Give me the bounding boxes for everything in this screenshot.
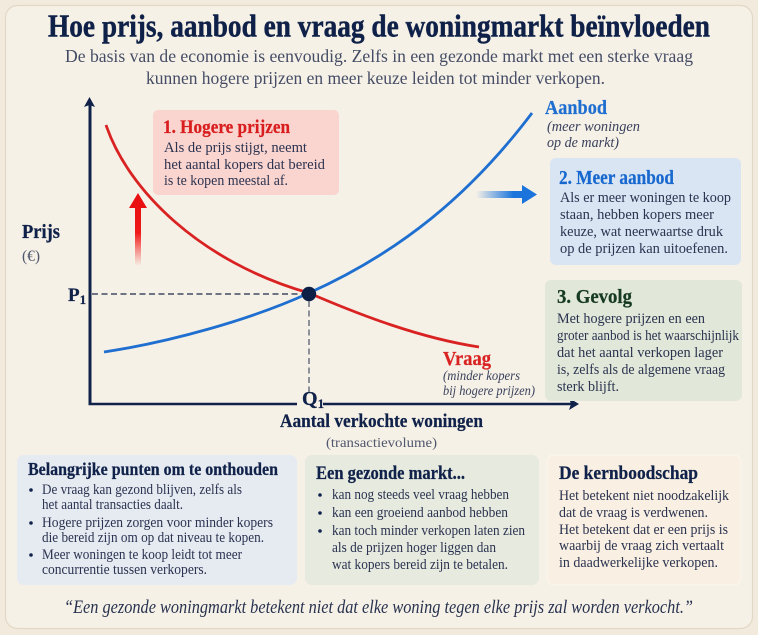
demand label [443,348,535,399]
panel: een gezonde markt: kan een groeiend aanbod hebben [332,505,509,521]
P1 label: 1 [80,292,86,307]
quantity axis [88,398,579,410]
panel: gevolg: dat het aantal verkopen lager [557,344,723,361]
panel: een gezonde markt [305,455,539,585]
P1 label: P [68,285,80,306]
panel: gevolg: 3. Gevolg [557,286,632,308]
panel: een gezonde markt: Een gezonde markt... [316,464,465,484]
panel: hogere prijzen: 1. Hogere prijzen [163,117,290,138]
subtitle: De basis van de economie is eenvoudig. Zelfs in een gezonde markt met een sterke vraag [65,46,693,66]
panel: belangrijke punten [17,455,297,585]
x axis unit: (transactievolume) [326,436,437,451]
supply curve [104,113,532,352]
demand label: Vraag [443,348,492,370]
Q1 label: Q [302,388,318,410]
panel: een gezonde markt: wat kopers bereid zijn te betalen. [332,557,508,573]
panel: de kernboodschap: in daadwerkelijke verkopen. [559,555,718,571]
equilibrium point [302,287,316,301]
panel: belangrijke punten: Hogere prijzen zorgen voor minder kopers [42,515,273,531]
panel: meer aanbod: 2. Meer aanbod [559,167,674,189]
supply label: Aanbod [545,97,607,119]
arrow: more supply [476,185,537,204]
panel: meer aanbod: Als er meer woningen te koop [560,189,731,206]
y axis unit: (€) [22,248,40,265]
subtitle: kunnen hogere prijzen en meer keuze leiden tot minder verkopen. [146,68,605,88]
arrow: price up [129,193,147,266]
y axis label: Prijs [22,221,60,243]
panel: hogere prijzen: is te kopen meestal af. [164,172,288,189]
panel: een gezonde markt: kan toch minder verkopen laten zien [332,523,526,539]
panel: gevolg: is, zelfs als de algemene vraag [557,361,725,378]
panel: belangrijke punten: het aantal transacties daalt. [42,497,183,513]
Q1 guide line [308,301,310,393]
panel: hogere prijzen: het aantal kopers dat bereid [164,156,325,173]
x axis label: Aantal verkochte woningen [280,411,483,432]
panel: belangrijke punten: concurrentie tussen verkopers. [42,562,207,578]
supply label: (meer woningen [547,119,640,135]
panel: gevolg: Met hogere prijzen en een [557,310,705,327]
panel: hogere prijzen [153,110,339,195]
panel: een gezonde markt: als de prijzen hoger liggen dan [332,540,497,556]
panel: hogere prijzen: Als de prijs stijgt, neemt [164,139,308,156]
subtitle [65,46,693,88]
P1 guide line [92,293,303,295]
panel: meer aanbod: keuze, wat neerwaartse druk [560,223,723,240]
demand curve [106,125,479,347]
panel: de kernboodschap: dat de vraag is verdwenen. [559,505,708,521]
panel: belangrijke punten: die bereid zijn om op dat niveau te kopen. [42,530,264,546]
panel: belangrijke punten: Meer woningen te koop leidt tot meer [42,547,242,563]
panel: de kernboodschap: Het betekent niet noodzakelijk [559,488,730,504]
panel: meer aanbod [550,158,741,265]
panel: een gezonde markt: kan nog steeds veel vraag hebben [332,487,510,503]
panel: belangrijke punten: De vraag kan gezond blijven, zelfs als [42,482,242,498]
panel: de kernboodschap: waarbij de vraag zich vertaalt [559,538,724,554]
panel: de kernboodschap: De kernboodschap [559,464,698,484]
panel: meer aanbod: op de prijzen kan uitoefenen. [560,240,728,257]
supply label: op de markt) [547,135,619,151]
price axis [84,97,95,405]
Q1 label: 1 [318,396,324,411]
panel: de kernboodschap: Het betekent dat er een prijs is [559,522,728,538]
demand label: (minder kopers [443,368,520,384]
panel: gevolg: sterk blijft. [557,378,619,395]
demand label: bij hogere prijzen) [443,383,535,399]
chart: supply and demand [22,97,640,451]
panel: de kernboodschap [547,455,741,585]
supply label [545,97,640,151]
panel: gevolg [545,280,742,401]
panel: belangrijke punten: Belangrijke punten om te onthouden [28,459,278,479]
panel: meer aanbod: staan, hebben kopers meer [560,206,714,223]
